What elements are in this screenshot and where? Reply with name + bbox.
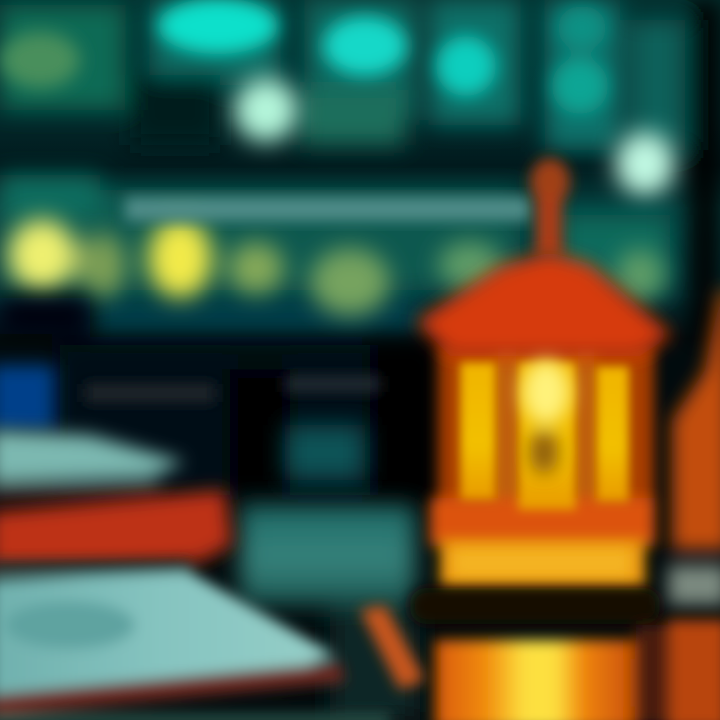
lantern (410, 158, 672, 624)
blue book corner (0, 365, 55, 430)
stacked books (0, 430, 390, 720)
lantern finial (530, 158, 570, 255)
pencil / orange stripe (360, 605, 425, 690)
lantern body (430, 345, 655, 590)
middle band: teal and yellow lights (0, 175, 670, 335)
table surface: teal (240, 505, 420, 720)
top book (0, 430, 185, 500)
lower book (0, 562, 390, 720)
lantern centre flame (522, 360, 570, 474)
upper windows: teal lights (0, 0, 720, 340)
faint sign text band (125, 197, 530, 221)
lantern reflection on table (435, 620, 720, 720)
dark lower building (0, 298, 440, 510)
red book (0, 490, 232, 570)
lantern roof (416, 252, 672, 356)
faint lower sign (85, 376, 380, 402)
second lantern at right edge (668, 290, 720, 605)
lantern dark base (410, 588, 660, 624)
lantern glowing panes (460, 362, 629, 510)
lantern base glow (452, 548, 632, 578)
